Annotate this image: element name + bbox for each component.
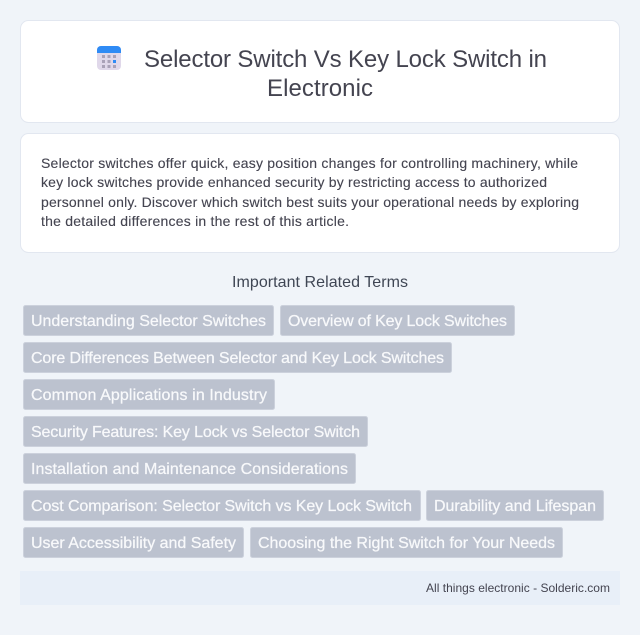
tag: durability and lifespan: Durability and Lifespan bbox=[434, 498, 596, 515]
tag: core differences: Core Differences Between Selector and Key Lock Switches bbox=[31, 350, 444, 367]
tag: user accessibility: User Accessibility and Safety bbox=[31, 535, 236, 552]
tag: common applications: Common Applications in Industry bbox=[31, 387, 267, 404]
tag: overview of key lock switches bbox=[280, 306, 514, 336]
footer band: All things electronic - Solderic.com bbox=[426, 581, 610, 595]
tag: choosing the right switch: Choosing the Right Switch for Your Needs bbox=[258, 535, 555, 552]
tag: understanding selector switches bbox=[24, 306, 274, 336]
panel: title card bbox=[20, 20, 620, 122]
footer band bbox=[20, 571, 620, 605]
tag: installation and maintenance: Installation and Maintenance Considerations bbox=[31, 461, 348, 478]
panel: related term tags bbox=[24, 306, 604, 558]
tag: overview of key lock switches: Overview of Key Lock Switches bbox=[288, 313, 507, 330]
text block: intro bbox=[41, 155, 579, 229]
text block: intro: key lock switches provide enhanced security by restricting access to authorized bbox=[41, 174, 547, 190]
tag: core differences bbox=[24, 342, 452, 372]
tag: security features bbox=[24, 416, 368, 446]
tag: common applications bbox=[24, 380, 274, 410]
tag: installation and maintenance bbox=[24, 454, 356, 484]
tag: user accessibility bbox=[24, 528, 244, 558]
text block: intro: the detailed differences in the rest of this article. bbox=[41, 213, 349, 229]
tag: durability and lifespan bbox=[426, 490, 604, 520]
panel: intro paragraph bbox=[20, 134, 620, 252]
text block: intro: personnel only. Discover which switch best suits your operational needs by exploring bbox=[41, 194, 579, 210]
text block: intro: Selector switches offer quick, easy position changes for controlling machinery, while bbox=[41, 155, 578, 171]
tag: security features: Security Features: Key Lock vs Selector Switch bbox=[31, 424, 360, 441]
icon: calendar keypad bbox=[97, 46, 121, 70]
heading: title: Selector Switch Vs Key Lock Switch in bbox=[144, 46, 547, 73]
tag: cost comparison bbox=[24, 490, 420, 520]
heading: important related terms: Important Related Terms bbox=[232, 274, 408, 291]
heading: title: Electronic bbox=[267, 75, 373, 102]
tag: understanding selector switches: Understanding Selector Switches bbox=[31, 313, 266, 330]
tag: cost comparison: Cost Comparison: Selector Switch vs Key Lock Switch bbox=[31, 498, 412, 515]
heading: title bbox=[144, 46, 547, 102]
tag: choosing the right switch bbox=[250, 528, 562, 558]
